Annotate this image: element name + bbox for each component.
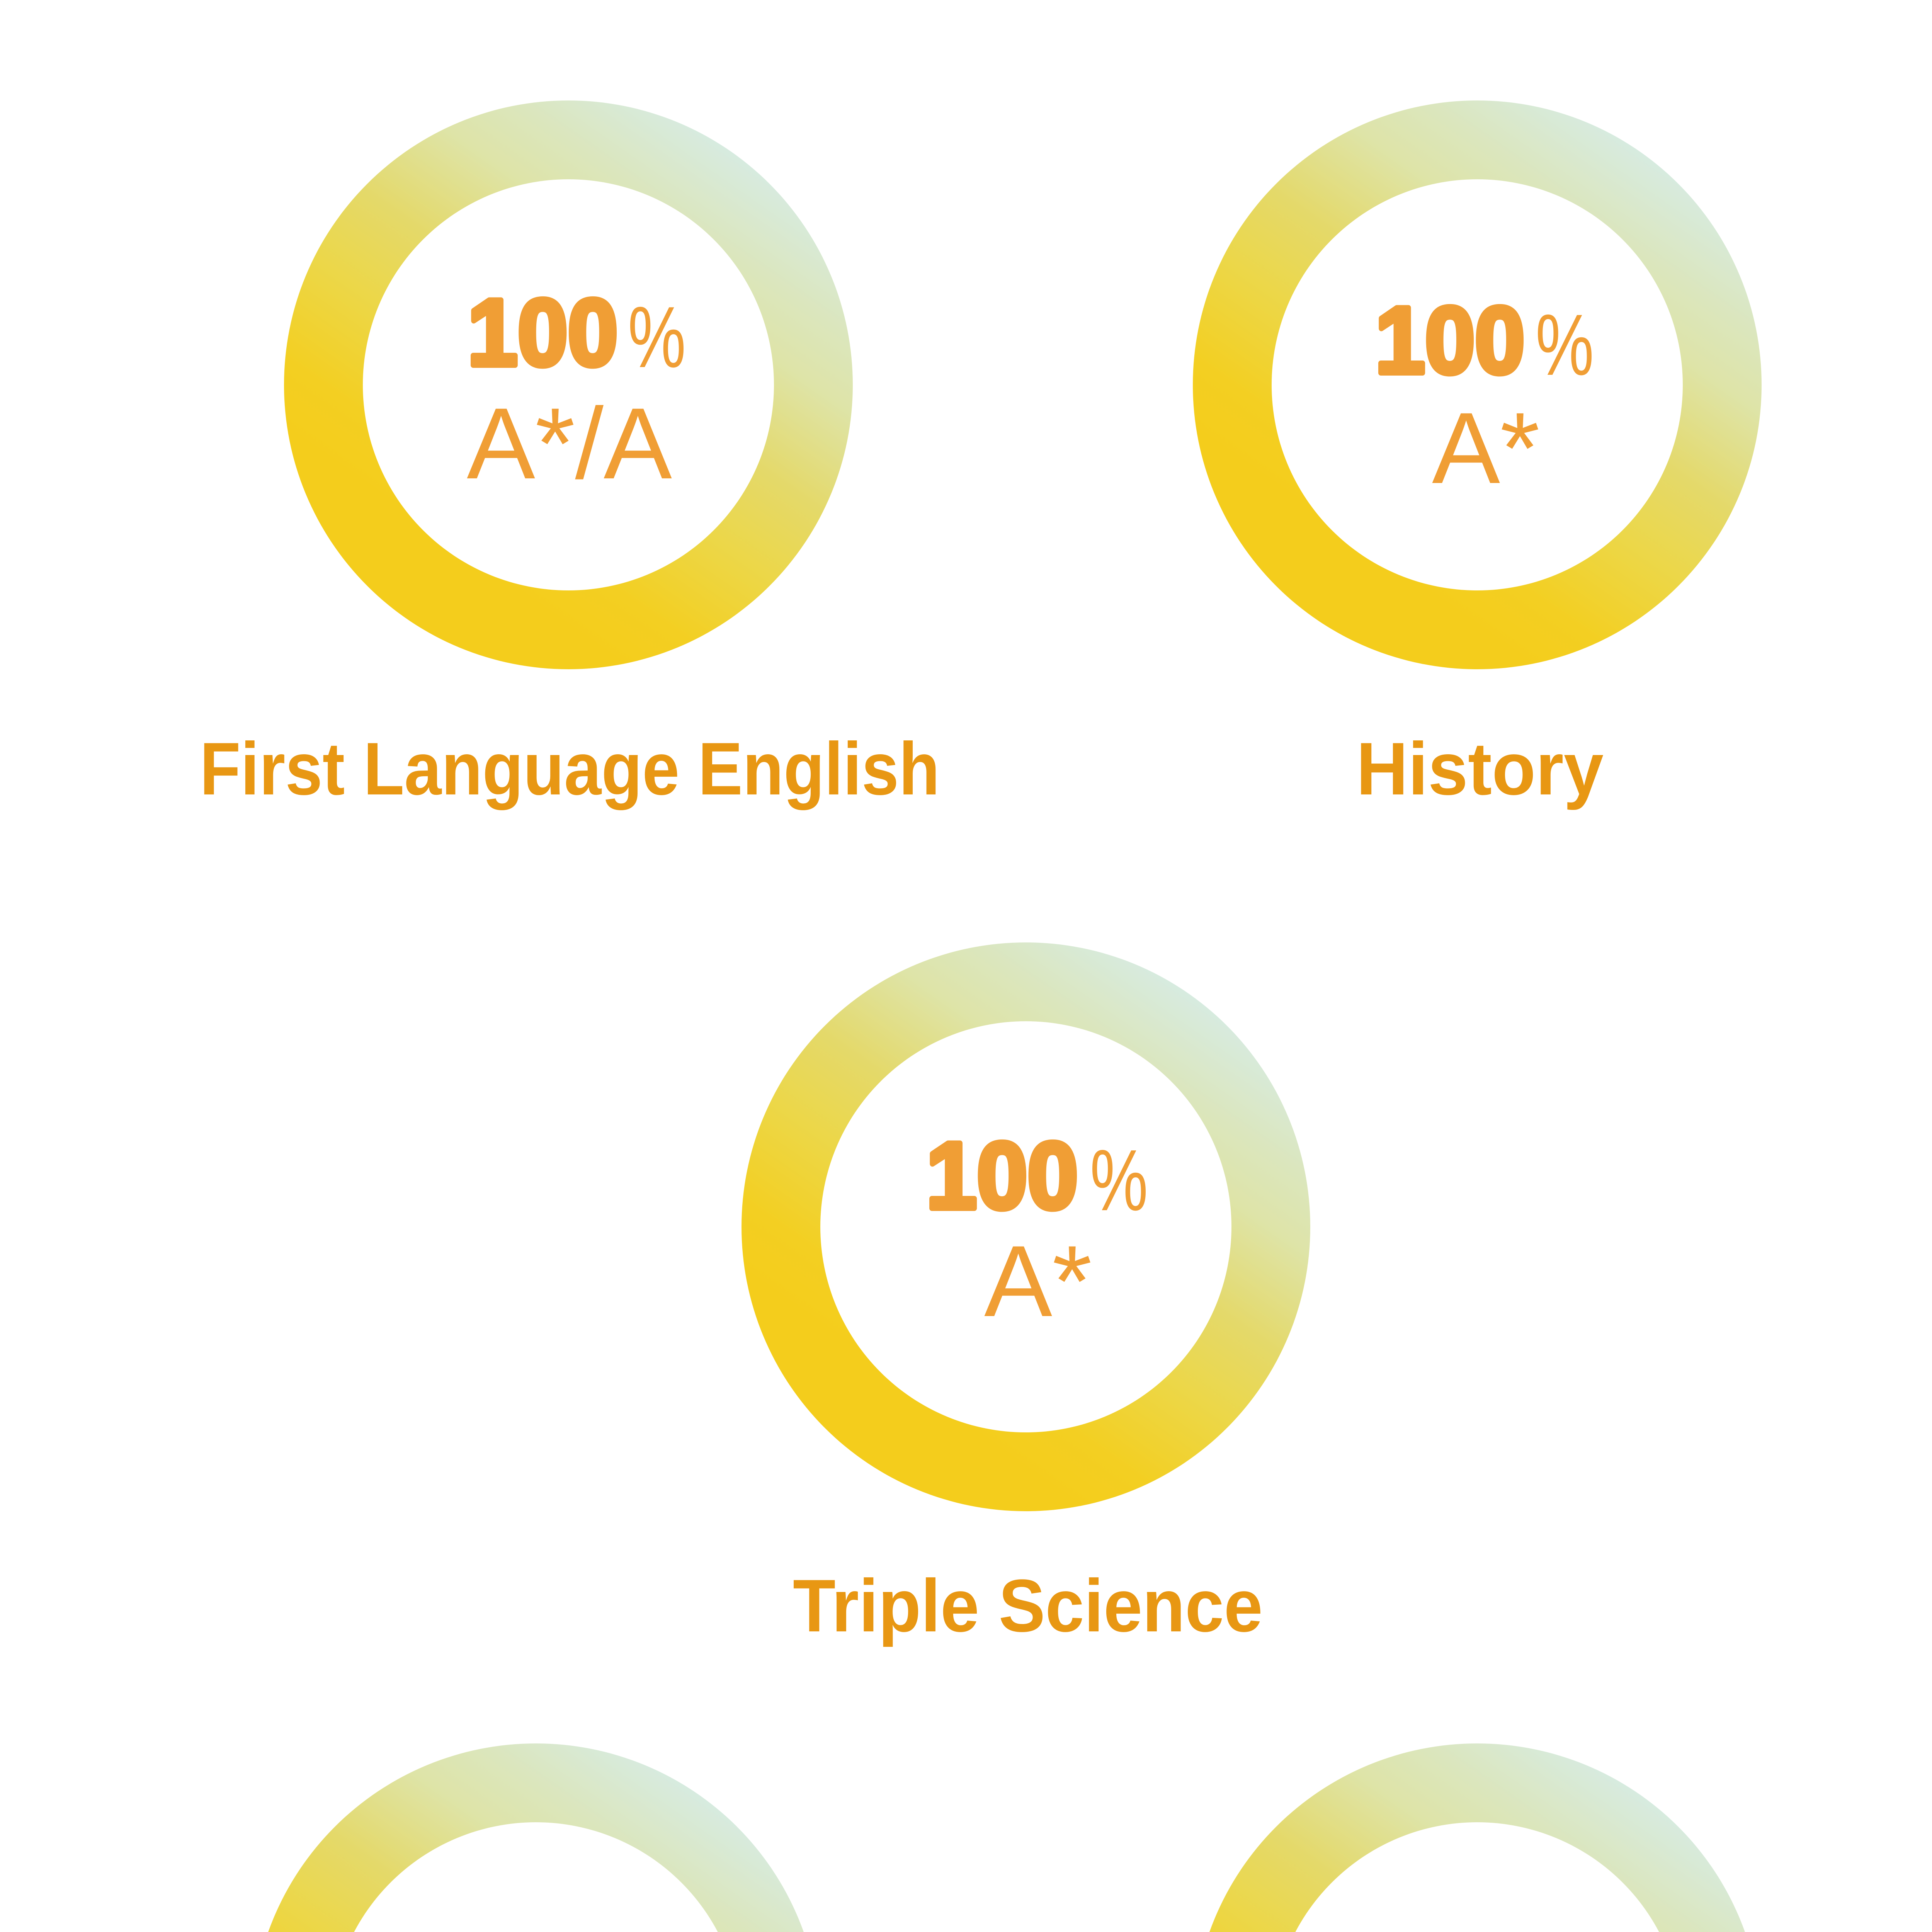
ring chart: Global Perspectives	[252, 1743, 820, 1932]
ring chart: Mathematics	[1193, 1743, 1762, 1932]
panel: Triple Science	[742, 942, 1310, 1647]
ring chart: First Language English	[284, 100, 853, 669]
panel: First Language English	[200, 100, 940, 810]
value: 100%: 100	[926, 1122, 1078, 1228]
label: First Language English: First Language English	[200, 727, 940, 810]
value: 100%: %	[628, 288, 686, 386]
label: Triple Science: Triple Science	[793, 1564, 1263, 1647]
panel: History	[1193, 100, 1762, 810]
value: 100%: 100	[468, 279, 618, 385]
value: 100%: %	[1090, 1131, 1148, 1229]
grade: A*/A: A*/A	[467, 387, 672, 500]
panel: Global Perspectives	[207, 1743, 866, 1932]
ring chart: Triple Science	[742, 942, 1310, 1511]
grade: A*: A*	[1432, 391, 1540, 505]
panel: Mathematics	[1193, 1743, 1762, 1932]
grade: A*: A*	[984, 1225, 1092, 1338]
value: 100%: %	[1536, 296, 1594, 393]
ring chart: History	[1193, 100, 1762, 669]
label: History: History	[1356, 727, 1604, 810]
value: 100%: 100	[1375, 287, 1525, 393]
